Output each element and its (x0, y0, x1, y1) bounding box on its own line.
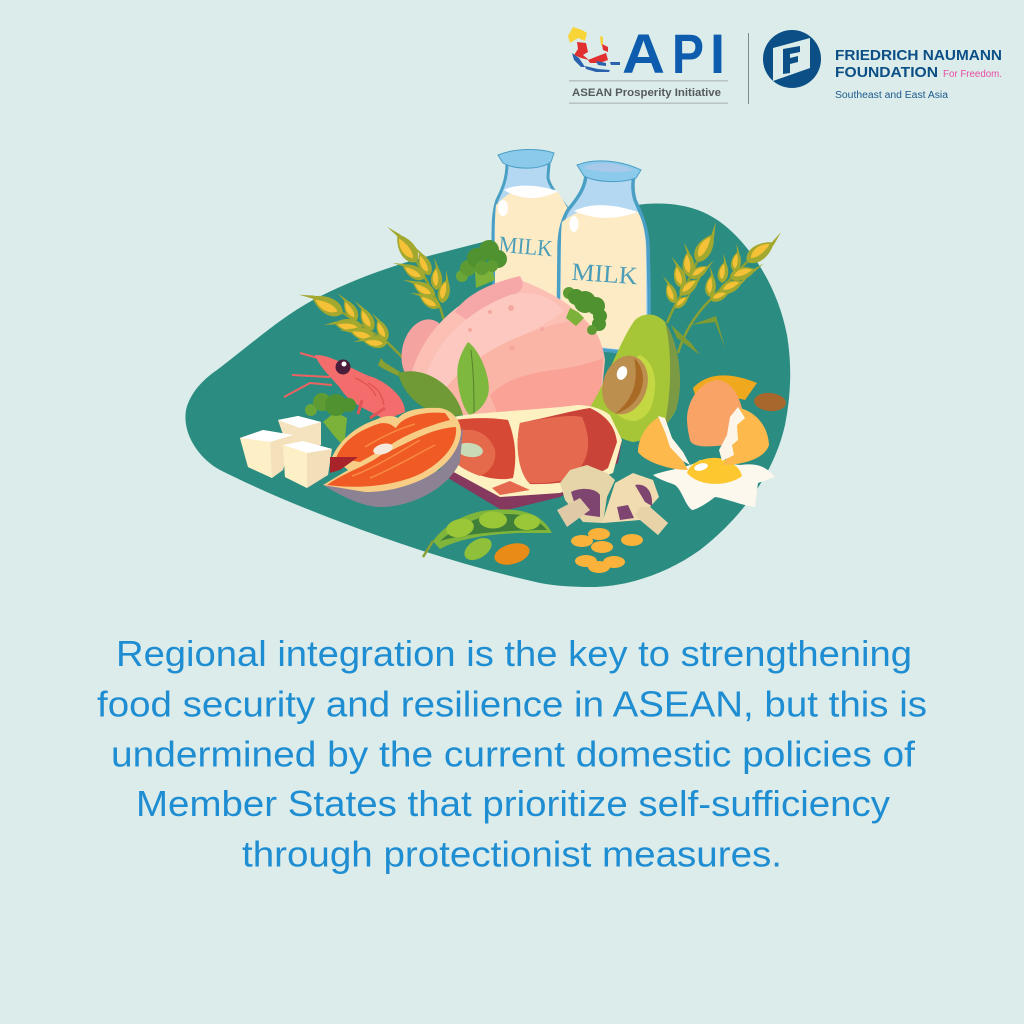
API wordmark: I (710, 22, 725, 85)
broccoli: left (305, 393, 356, 446)
mushrooms (557, 465, 668, 535)
beans and pod (423, 509, 552, 568)
message text (97, 633, 927, 874)
avocado (590, 314, 680, 442)
broccoli: back (456, 240, 507, 288)
milk bottle: back (493, 149, 570, 300)
tofu cubes (240, 416, 332, 488)
label: MILK back: MILK (498, 232, 554, 261)
icon: ASEAN map (568, 27, 620, 72)
wheat: left pair (297, 220, 454, 376)
label: MILK front: MILK (571, 259, 638, 290)
broccoli: front (563, 287, 607, 335)
foundation name line 1: FRIEDRICH NAUMANN (835, 47, 1002, 64)
initiative name: ASEAN Prosperity Initiative (572, 87, 721, 99)
food illustration (240, 149, 788, 573)
message text: Member States that prioritize self-sufficiency (136, 783, 890, 824)
message text: undermined by the current domestic policies of (111, 734, 916, 774)
milk bottle: front (558, 161, 649, 355)
message text: food security and resilience in ASEAN, but this is (97, 684, 927, 724)
icon: F roundel (763, 30, 821, 88)
fried egg (653, 458, 775, 510)
foundation name line 2: FOUNDATION (835, 64, 938, 81)
salmon steak (323, 408, 463, 507)
tagline: For Freedom. (943, 69, 1002, 80)
API wordmark: A (622, 22, 665, 85)
API wordmark (622, 22, 725, 85)
almond (753, 392, 787, 412)
logo: ASEAN Prosperity Initiative (568, 22, 728, 104)
leaves (398, 342, 489, 416)
shrimp (284, 353, 405, 420)
whole egg (687, 380, 744, 446)
message text: Regional integration is the key to strengthening (116, 633, 912, 674)
chicken (396, 276, 605, 420)
logo: Friedrich Naumann Foundation (763, 30, 1002, 101)
yellow nut behind egg (693, 375, 757, 400)
teal blob (185, 203, 790, 587)
message text: through protectionist measures. (242, 834, 782, 874)
meat steak (443, 405, 622, 511)
egg shell: left (638, 417, 688, 470)
wheat: right pair (660, 220, 788, 355)
lentils (571, 528, 643, 573)
egg shell: right (722, 408, 769, 465)
API wordmark: P (672, 22, 704, 85)
region: Southeast and East Asia (835, 90, 948, 101)
